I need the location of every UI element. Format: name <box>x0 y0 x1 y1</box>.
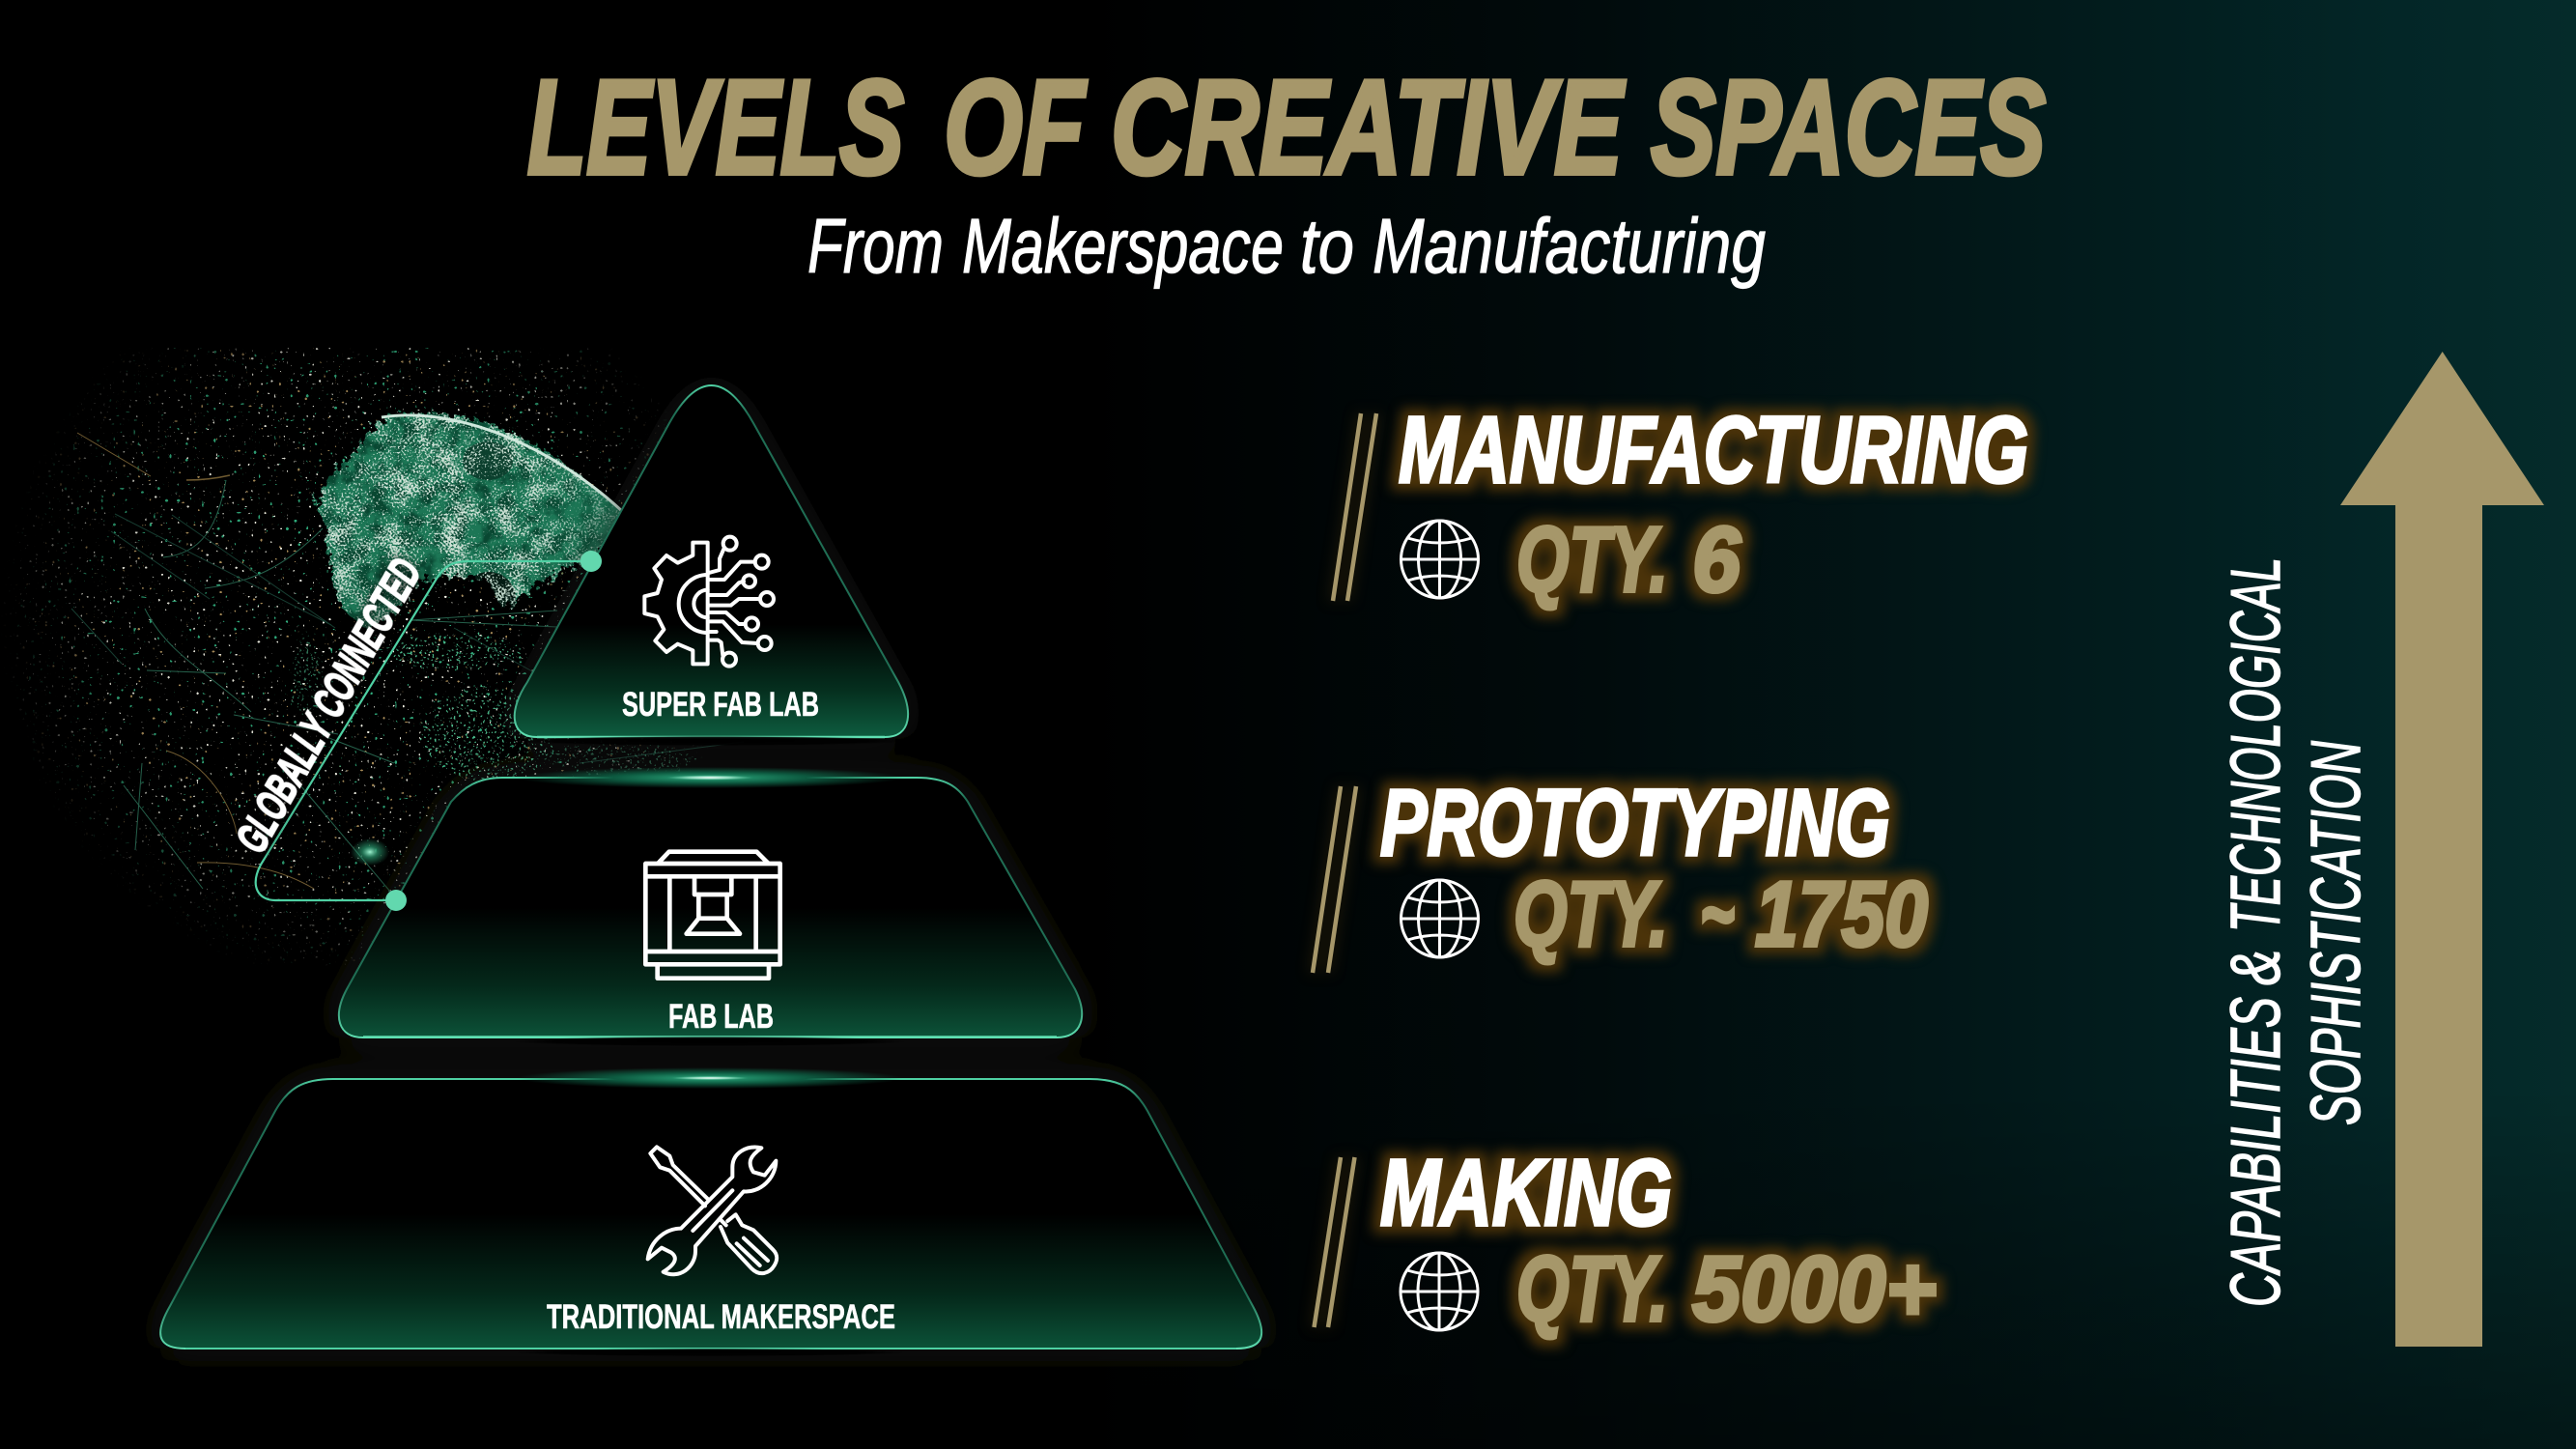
icon: globe <box>1401 521 1478 598</box>
axis label: CAPABILITIES <box>2218 997 2295 1307</box>
south america dotted land <box>290 631 696 782</box>
connector dot top <box>580 551 602 572</box>
tier text: MANUFACTURING <box>1399 397 2028 502</box>
panel: fab lab <box>339 767 1082 1046</box>
tier text <box>1380 770 1928 966</box>
tier text <box>1399 397 2028 611</box>
icon: crossed tools <box>648 1147 777 1274</box>
subtitle: Makerspace <box>962 203 1284 289</box>
panel: traditional makerspace <box>160 1067 1261 1356</box>
tier text <box>1380 1140 1937 1341</box>
connector line <box>256 561 591 900</box>
axis label: SOPHISTICATION <box>2298 740 2375 1125</box>
subtitle: From <box>807 203 944 289</box>
globe land mass <box>311 408 622 630</box>
title: SPACES <box>1651 52 2046 203</box>
tier text: PROTOTYPING <box>1380 770 1890 875</box>
divider slashes <box>1314 1157 1354 1327</box>
axis label: & <box>2218 950 2295 985</box>
icon: gear circuit <box>644 537 774 667</box>
tier text: QTY. <box>1516 508 1668 611</box>
globe particle artwork <box>0 348 744 966</box>
glow spot <box>351 838 389 866</box>
connector dot bottom <box>385 890 407 911</box>
subtitle <box>807 203 1766 289</box>
tier text: QTY. <box>1514 863 1668 966</box>
tier text: ~ <box>1700 863 1735 966</box>
icon: 3d printer <box>645 852 780 979</box>
label: TRADITIONAL MAKERSPACE <box>547 1298 895 1336</box>
tier text: QTY. <box>1516 1237 1668 1341</box>
axis label: TECHNOLOGICAL <box>2218 557 2295 932</box>
title: CREATIVE <box>1111 52 1626 203</box>
tier text: 1750 <box>1755 863 1928 966</box>
connector: globally connected <box>225 550 591 900</box>
tier text: MAKING <box>1380 1140 1672 1245</box>
label: FAB LAB <box>668 998 774 1036</box>
connector label: GLOBALLY CONNECTED <box>225 550 431 861</box>
title <box>527 52 2046 203</box>
tier: prototyping <box>1313 770 1928 973</box>
tier text: 5000+ <box>1692 1237 1937 1341</box>
tier text: 6 <box>1692 508 1741 611</box>
arrow <box>2340 352 2544 1347</box>
icon: globe <box>1401 1253 1478 1330</box>
panel: super fab lab <box>513 385 909 746</box>
title: LEVELS <box>527 52 904 203</box>
title: OF <box>944 52 1087 203</box>
subtitle: to <box>1300 203 1354 289</box>
label: SUPER FAB LAB <box>622 686 819 724</box>
panel glow <box>160 385 1261 1349</box>
divider slashes <box>1313 786 1356 973</box>
icon: globe <box>1401 880 1478 957</box>
subtitle: Manufacturing <box>1373 203 1766 289</box>
axis label <box>2218 557 2375 1307</box>
tier: manufacturing <box>1333 397 2028 611</box>
tier: making <box>1314 1140 1937 1341</box>
divider slashes <box>1333 413 1376 601</box>
